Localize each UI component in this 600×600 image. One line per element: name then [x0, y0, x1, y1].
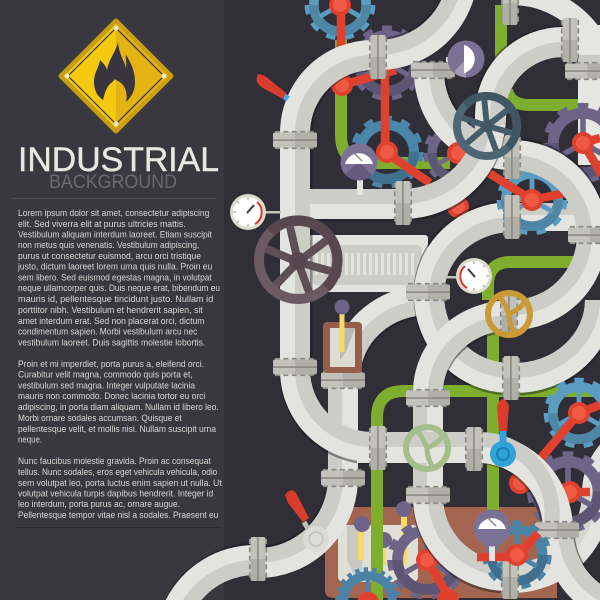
valve: green [406, 427, 448, 469]
handwheel: large brown [259, 220, 341, 300]
body text: paragraph 1: non metus quis venenatis. Vestibulum adipiscing, [18, 240, 199, 251]
gear: right lower blue [547, 381, 600, 445]
pipe: lower center arc [429, 295, 510, 380]
body text: paragraph 3: leo interdum, porta purus ac, ornare augue. [18, 499, 180, 510]
pipe: top S curve [373, 0, 463, 55]
body text: paragraph 1: condimentum sapien. Morbi vestibulum arcu nec [18, 326, 198, 338]
switch panel [338, 501, 418, 582]
panel: left column [0, 0, 224, 600]
body text: paragraph 3: Pellentesque tempor vitae nisl a sodales. Praesent eu [18, 510, 218, 521]
gear: middle blue [354, 118, 420, 186]
pipe: horizontal stub right [512, 203, 582, 231]
pipe: bottom left S curve [166, 476, 343, 600]
body text: paragraph 1: Vestibulum aliquam interdum laoreet. Etiam suscipit [18, 230, 212, 240]
red handle: top [257, 74, 288, 99]
gear: middle purple [426, 122, 488, 184]
body text: paragraph 2: Curabitur velit magna, commodo quis porta et, [18, 370, 193, 380]
body text: paragraph 2: pellentesque velit, et mollis nisi. Nullam suscipit urna [18, 424, 217, 435]
pipe: upper right arc [489, 41, 570, 125]
flanges: vertical [250, 0, 578, 581]
body text: paragraph 2: vestibulum sed magna. Integer vulputate lacinia [18, 380, 196, 392]
red lever: center [447, 142, 570, 211]
body text: paragraph 1: amet interdum erat. Sed non placerat orci, dictum [18, 316, 204, 327]
pipe: bottom right rising [507, 440, 600, 578]
handwheel: dark slate [457, 96, 517, 156]
body text: paragraph 1 [17, 208, 220, 348]
body text: paragraph 3: sem volutpat leo, porta luctus enim sapien ut nulla. Ut [18, 478, 222, 489]
pipe: mid left arc behind switch [345, 300, 428, 380]
body text: paragraph 1: mauris id, pellentesque tincidunt justo. Nullam id [18, 294, 213, 305]
red lever: bottom [357, 549, 459, 600]
subtitle: BACKGROUND [49, 172, 177, 193]
gauge: white left [230, 194, 281, 230]
body text: paragraph 1: vestibulum laoreet. Duis sagittis molestie lobortis. [18, 338, 205, 348]
body text: paragraph 1: sem libero. Sed euismod egestas magna, in volutpat [18, 272, 212, 284]
title: INDUSTRIAL [18, 141, 219, 179]
body text: paragraph 3: Nunc faucibus molestie gravida. Proin ac consequat [18, 456, 211, 467]
body text: paragraph 1: Lorem ipsum dolor sit amet, consectetur adipiscing [18, 208, 209, 219]
lever: red and grey knob [285, 490, 329, 552]
lever: red and blue knob [490, 399, 516, 467]
pipe: vertical lower left [328, 375, 358, 483]
gear: right middle blue [500, 168, 564, 232]
body text: paragraph 1: justo, dictum laoreet lorem urna quis nulla. Proin eu [17, 262, 212, 272]
switch box on pipe [323, 300, 362, 373]
pipe: horizontal and central S curve [310, 115, 491, 206]
body text: paragraph 2 [18, 359, 219, 446]
radiator [308, 235, 428, 292]
gear: bottom blue [338, 570, 398, 600]
pipe: bottom right corner [543, 530, 600, 600]
red lever: right lower [509, 402, 600, 503]
red levers: upper [329, 0, 469, 218]
pipe: mid center arc [429, 215, 512, 295]
gear: box right blue [485, 523, 549, 587]
pipe: upper center arc [429, 65, 514, 155]
red lever: right [572, 132, 600, 175]
body text: paragraph 1: purus ut consectetur euismod, arcu orci tristique [18, 251, 201, 262]
gauge: white right [445, 258, 492, 294]
body text: paragraph 1: elit. Sed viverra elit at purus ultricies mattis. [18, 219, 186, 230]
pipe: lower right arc [510, 300, 600, 380]
gear: top purple [352, 28, 422, 98]
gauge: purple middle [340, 144, 378, 195]
pipe: long lower arc left to right [295, 365, 558, 530]
pipe: S curve from valve down to cross [428, 315, 512, 394]
body text: paragraph 2: mauris non commodo. Donec lacinia tortor eu orci [18, 391, 205, 402]
flanges: horizontal [273, 62, 600, 538]
gauge: purple bottom [474, 510, 510, 561]
gear: right lower purple [530, 454, 600, 530]
green pipes [341, 5, 600, 600]
gauge: purple top [446, 40, 484, 78]
valve: yellow [488, 293, 530, 335]
red lever: box [477, 533, 538, 566]
pipe: right arc upper [512, 153, 592, 315]
body text: paragraph 3: volutpat vehicula turpis dapibus hendrerit. Integer id [18, 488, 213, 500]
gear: lower purple [390, 523, 464, 597]
warning sign: flame [61, 21, 171, 131]
pipe: left main arc [295, 55, 375, 370]
body text: paragraph 2: adipiscing, in porta diam aliquam. Nullam id libero leo. [18, 402, 219, 413]
body text: paragraph 1: porttitor nibh. Vestibulum et hendrerit sapien, sit [18, 305, 203, 316]
body text: paragraph 2: Morbi ornare sodales accumsan. Quisque et [18, 413, 182, 424]
body text: paragraph 3: tellus. Nunc sodales, eros eget vehicula vehicula, odio [18, 467, 217, 478]
body text: paragraph 1: neque ullamcorper quis. Duis neque erat, bibendum eu [18, 283, 220, 294]
pipe: vertical center and lower arc [413, 392, 507, 578]
gear: right purple [546, 106, 600, 180]
flange: bottom vertical [502, 555, 518, 599]
pipe: top right arc [510, 0, 600, 165]
gear: top blue [308, 0, 372, 37]
body text: paragraph 2: Proin et mi imperdiet, porta purus a, eleifend orci. [18, 359, 204, 370]
body text: paragraph 3 [18, 456, 222, 521]
body text: paragraph 2: neque. [18, 434, 42, 446]
brown machine box [325, 507, 557, 598]
